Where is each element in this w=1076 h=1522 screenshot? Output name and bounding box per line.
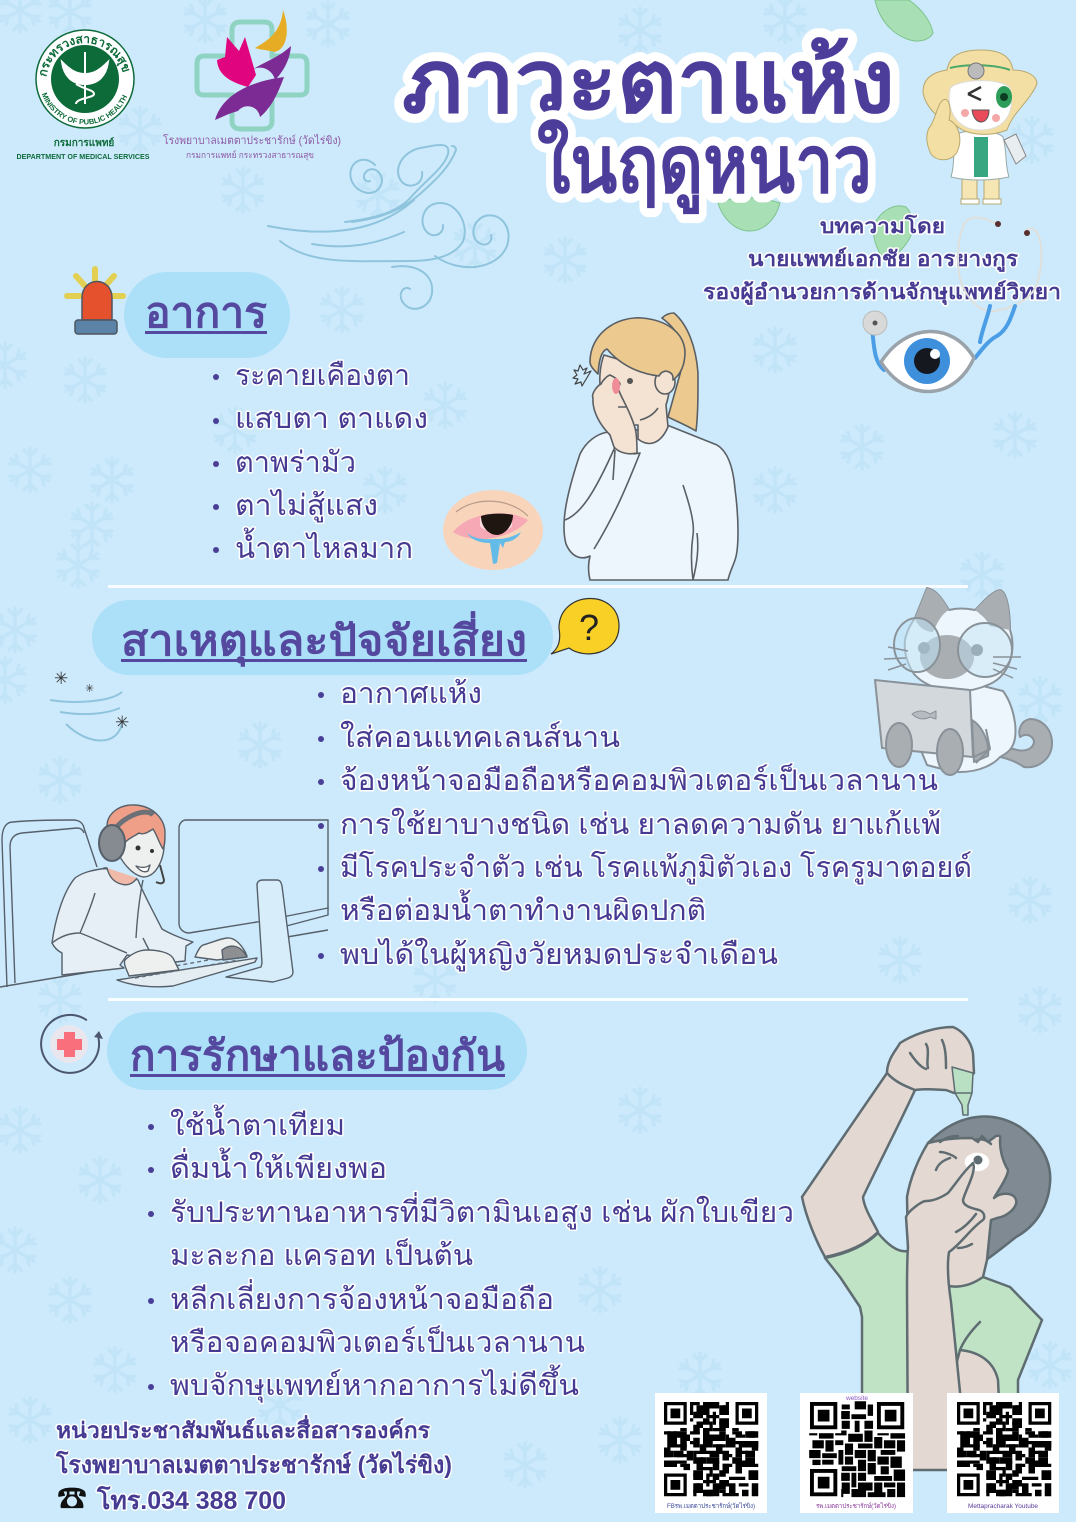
- QR code: facebook: FBรพ.เมตตาประชารักษ์(วัดไร่ขิง): [667, 1502, 755, 1510]
- treatment list: ดื่มน้ำให้เพียงพอ: [170, 1147, 387, 1185]
- byline: นายแพทย์เอกชัย อารยางกูร: [748, 247, 1019, 273]
- QR code: website: รพ.เมตตาประชารักษ์(วัดไร่ขิง): [816, 1502, 896, 1510]
- title: [402, 32, 895, 215]
- byline: บทความโดย: [820, 214, 945, 238]
- treatment list: มะละกอ แครอท เป็นต้น: [170, 1237, 473, 1272]
- illustration: man using eye drops: [802, 1027, 1050, 1470]
- heading pill: [124, 272, 290, 358]
- logo: ministry of public health: กระทรวงสาธารณสุข: [40, 36, 130, 76]
- byline: [703, 214, 1061, 306]
- symptom list: ตาพร่ามัว: [235, 447, 356, 479]
- icon: red eye: [443, 490, 543, 570]
- footer contact: ☎: [57, 1483, 87, 1516]
- cause list: มีโรคประจำตัว เช่น โรคแพ้ภูมิตัวเอง โรครูมาตอยด์: [340, 850, 972, 885]
- symptom list: ระคายเคืองตา: [235, 360, 410, 392]
- title: ในฤดูหนาว: [537, 118, 872, 215]
- icon: siren: [67, 269, 123, 334]
- divider: [108, 585, 968, 588]
- QR code: website: website: [845, 1395, 868, 1402]
- symptom list: ตาไม่สู้แสง: [235, 488, 378, 523]
- icon: wind swirl: [268, 145, 509, 309]
- cause list: พบได้ในผู้หญิงวัยหมดประจำเดือน: [340, 937, 778, 972]
- heading pill: [92, 600, 553, 675]
- icon: question bubble: [551, 598, 619, 654]
- illustration: woman rubbing eye: [564, 313, 738, 580]
- symptom list: [213, 360, 428, 565]
- section: causes: [0, 588, 1052, 987]
- symptom list: แสบตา ตาแดง: [235, 403, 428, 435]
- logo: mettapracharak hospital: กรมการแพทย์ กระทรวงสาธารณสุข: [186, 149, 314, 161]
- logo: mettapracharak hospital: โรงพยาบาลเมตตาประชารักษ์ (วัดไร่ขิง): [163, 133, 341, 147]
- heading pill: [107, 1012, 527, 1090]
- QR code: youtube: [947, 1393, 1059, 1513]
- illustration: gamer at computer: [0, 805, 328, 987]
- cause list: อากาศแห้ง: [340, 678, 482, 710]
- QR code: youtube: Mettapracharak Youtube: [968, 1503, 1038, 1510]
- illustration: cat with laptop: [875, 588, 1052, 775]
- mascot doctor: [923, 50, 1037, 204]
- section: treatment: [37, 1011, 1050, 1470]
- logo: ministry of public health: [16, 29, 150, 161]
- decorative leaves: [718, 0, 933, 260]
- footer contact: หน่วยประชาสัมพันธ์และสื่อสารองค์กร: [56, 1414, 430, 1443]
- heading: อาการ: [145, 289, 267, 336]
- divider: [108, 998, 968, 1001]
- icon: cold wind: ✳: [85, 683, 94, 695]
- QR code: website: [800, 1393, 913, 1513]
- cause list: การใช้ยาบางชนิด เช่น ยาลดความดัน ยาแก้แพ้: [340, 807, 941, 841]
- treatment list: พบจักษุแพทย์หากอาการไม่ดีขึ้น: [170, 1364, 579, 1403]
- icon: cold wind: ✳: [54, 669, 68, 688]
- cause list: [318, 678, 972, 972]
- heading: การรักษาและป้องกัน: [130, 1032, 505, 1079]
- QR code: facebook: [655, 1393, 767, 1513]
- byline: รองผู้อำนวยการด้านจักษุแพทย์วิทยา: [703, 280, 1061, 306]
- icon: cold wind: [50, 669, 129, 741]
- title: ภาวะตาแห้ง: [402, 32, 895, 131]
- symptom list: น้ำตาไหลมาก: [235, 527, 413, 565]
- icon: medical cross: [37, 1011, 103, 1077]
- treatment list: หรือจอคอมพิวเตอร์เป็นเวลานาน: [170, 1324, 585, 1359]
- icon: eye with stethoscope: [863, 218, 1041, 392]
- treatment list: รับประทานอาหารที่มีวิตามินเอสูง เช่น ผักใบเขียว: [170, 1192, 794, 1230]
- section: symptoms: [67, 269, 738, 580]
- logo: ministry of public health: DEPARTMENT OF MEDICAL SERVICES: [16, 154, 150, 161]
- footer contact: โทร.034 388 700: [96, 1485, 286, 1515]
- cause list: ใส่คอนแทคเลนส์นาน: [340, 720, 620, 754]
- icon: question bubble: ?: [579, 607, 599, 648]
- treatment list: ใช้น้ำตาเทียม: [170, 1104, 345, 1142]
- cause list: หรือต่อมน้ำตาทำงานผิดปกติ: [340, 889, 706, 927]
- logo: ministry of public health: กรมการแพทย์: [54, 137, 114, 149]
- icon: cold wind: ✳: [115, 713, 129, 732]
- logo: mettapracharak hospital: [163, 10, 341, 161]
- cause list: จ้องหน้าจอมือถือหรือคอมพิวเตอร์เป็นเวลานาน: [340, 762, 938, 797]
- footer contact: [55, 1414, 452, 1516]
- logo: ministry of public health: MINISTRY OF PUBLIC HEALTH: [42, 92, 128, 124]
- treatment list: [148, 1104, 794, 1403]
- heading: สาเหตุและปัจจัยเสี่ยง: [121, 611, 527, 667]
- treatment list: หลีกเลี่ยงการจ้องหน้าจอมือถือ: [170, 1279, 554, 1316]
- footer contact: โรงพยาบาลเมตตาประชารักษ์ (วัดไร่ขิง): [55, 1450, 452, 1479]
